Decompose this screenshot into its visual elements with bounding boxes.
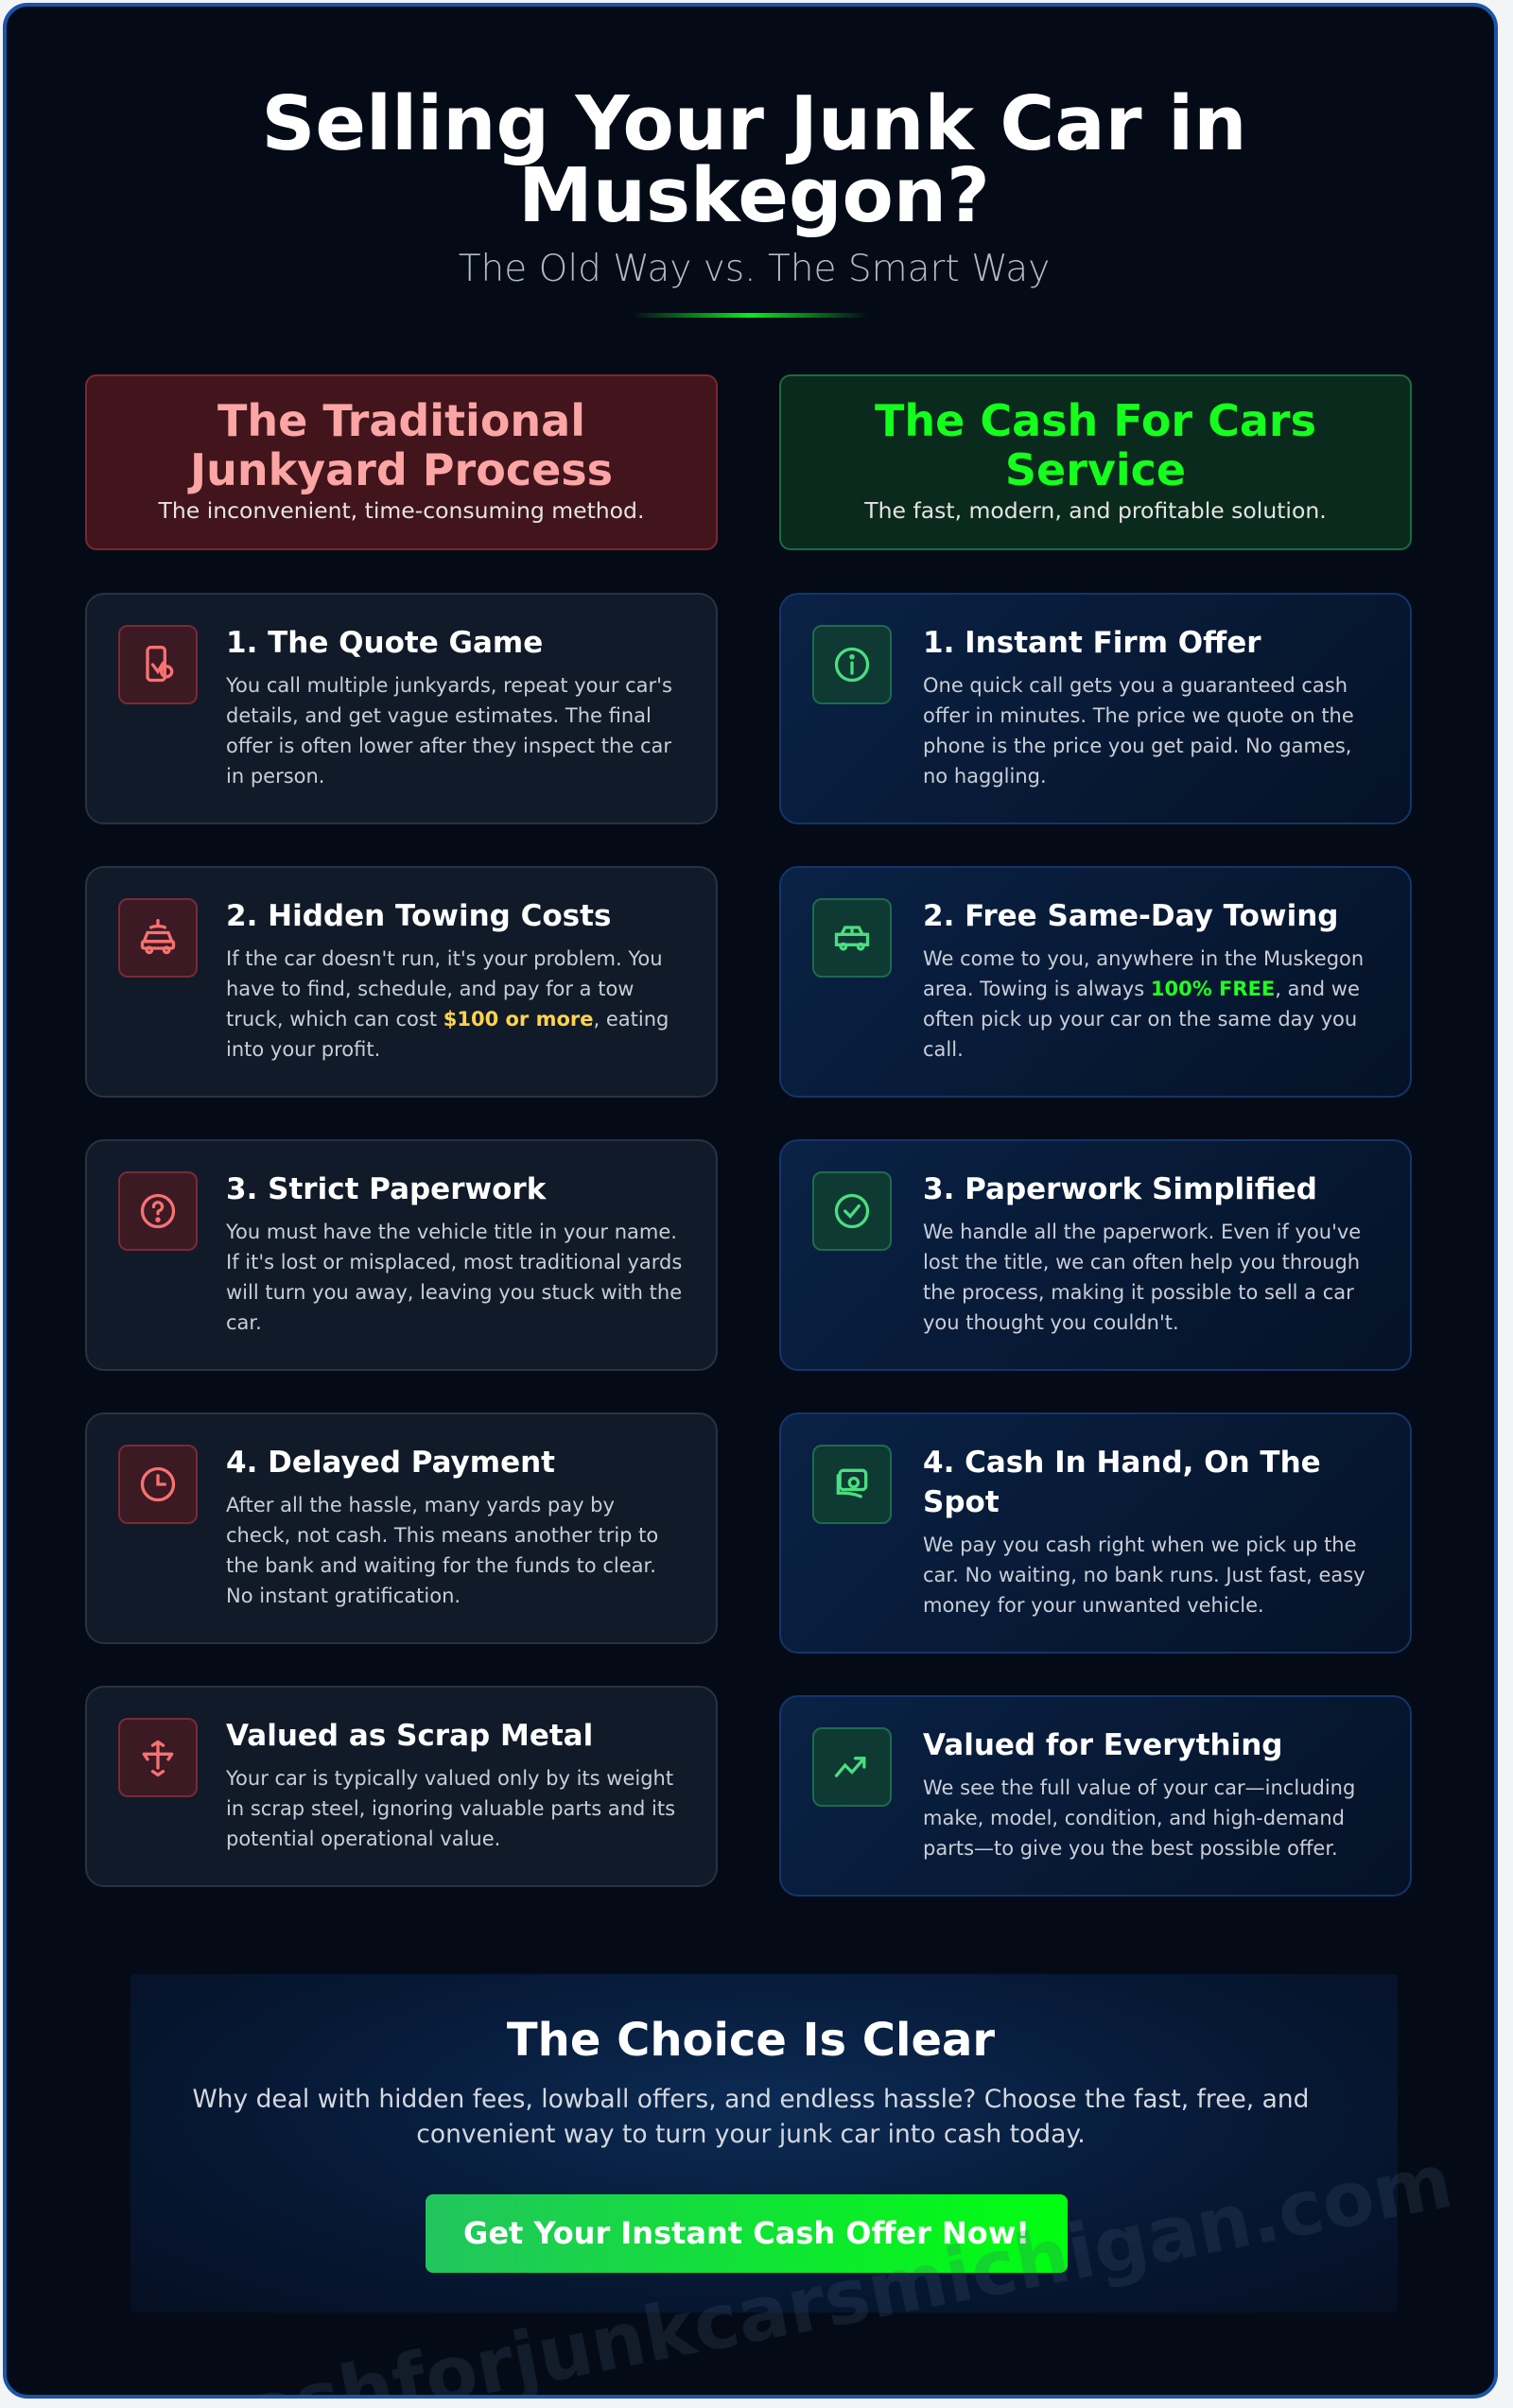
card: quote game: 1. The Quote Game (226, 626, 543, 660)
card: valued for everything: Valued for Everything (923, 1728, 1282, 1762)
header: traditional: The Traditional (217, 395, 585, 446)
title: Selling Your Junk Car in (262, 80, 1246, 167)
column: traditional (85, 593, 718, 1887)
header: traditional (85, 374, 718, 550)
card: paperwork: You must have the vehicle title in your name. If it's lost or misplaced, most traditional yards will turn you away, leaving you stuck with the car. (226, 1221, 682, 1334)
card: delayed payment: 4. Delayed Payment (226, 1446, 555, 1480)
header: traditional: Junkyard Process (190, 444, 613, 495)
card: paperwork simplified: 3. Paperwork Simplified (923, 1172, 1317, 1206)
cta button: Get Your Instant Cash Offer Now! (463, 2215, 1030, 2251)
card: delayed payment: After all the hassle, many yards pay by (226, 1494, 615, 1516)
card: cash in hand (779, 1412, 1412, 1654)
card: scrap metal: Valued as Scrap Metal (226, 1719, 593, 1753)
card: instant offer: 1. Instant Firm Offer (923, 626, 1261, 660)
card: towing costs: 2. Hidden Towing Costs (226, 899, 611, 933)
card: paperwork simplified: We handle all the paperwork. Even if you've lost the title, we can often help you through the process, making it possible to sell a car you thought you couldn't. (923, 1221, 1361, 1334)
card: instant offer: One quick call gets you a guaranteed cash offer in minutes. The price we quote on the phone is the price you get paid. No games, no haggling. (923, 674, 1354, 788)
header: cash for cars: The Cash For Cars (875, 395, 1316, 446)
column: cash for cars (779, 593, 1412, 1897)
card: free towing (779, 866, 1412, 1098)
card: scrap metal: Your car is typically valued only by its weight in scrap steel, ignoring valuable parts and its potential operational value. (226, 1767, 675, 1850)
cta button (426, 2194, 1068, 2273)
card: cash in hand: We pay you cash right when we pick up the car. No waiting, no bank runs. Just fast, easy money for your unwanted vehicle. (923, 1533, 1365, 1617)
card: free towing: We come to you, anywhere in the Muskegon area. Towing is always 100% FREE, and we often pick up your car on the same day you call. (923, 947, 1364, 1061)
title: Muskegon? (518, 152, 990, 239)
card: quote game: You call multiple junkyards, repeat your car's details, and get vague estimates. The final offer is often lower after they inspect the car in person. (226, 674, 672, 788)
cta heading: The Choice Is Clear (507, 2014, 995, 2067)
card: delayed payment (85, 1412, 718, 1644)
card: quote game (85, 593, 718, 824)
card: paperwork: 3. Strict Paperwork (226, 1172, 546, 1206)
subtitle: The Old Way vs. The Smart Way (459, 248, 1050, 290)
header: cash for cars (779, 374, 1412, 550)
card: valued for everything: We see the full value of your car—including make, model, condition, and high-demand parts—to give you the best possible offer. (923, 1776, 1355, 1860)
header: cash for cars: The fast, modern, and profitable solution. (864, 497, 1327, 524)
header: cash for cars: Service (1005, 444, 1186, 495)
header: traditional: The inconvenient, time-consuming method. (159, 497, 644, 524)
divider line (632, 313, 868, 318)
card: free towing: 2. Free Same-Day Towing (923, 899, 1338, 933)
cta section (130, 1974, 1398, 2313)
card: scrap metal (85, 1686, 718, 1887)
card: towing costs: If the car doesn't run, it's your problem. You have to find, schedule, and pay for a tow truck, which can cost $100 or more, eating into your profit. (226, 947, 669, 1061)
card: paperwork (85, 1139, 718, 1371)
card: delayed payment: check, not cash. This means another trip to the bank and waiting for the funds to clear. No instant gratification. (226, 1524, 658, 1607)
card: cash in hand: 4. Cash In Hand, On The Spot (923, 1446, 1321, 1519)
title (262, 80, 1246, 239)
card: towing costs (85, 866, 718, 1098)
cta text: Why deal with hidden fees, lowball offers, and endless hassle? Choose the fast, free, and convenient way to turn your junk car into cash today. (192, 2085, 1310, 2149)
card: paperwork simplified (779, 1139, 1412, 1371)
card: instant offer (779, 593, 1412, 824)
card: valued for everything (779, 1695, 1412, 1897)
